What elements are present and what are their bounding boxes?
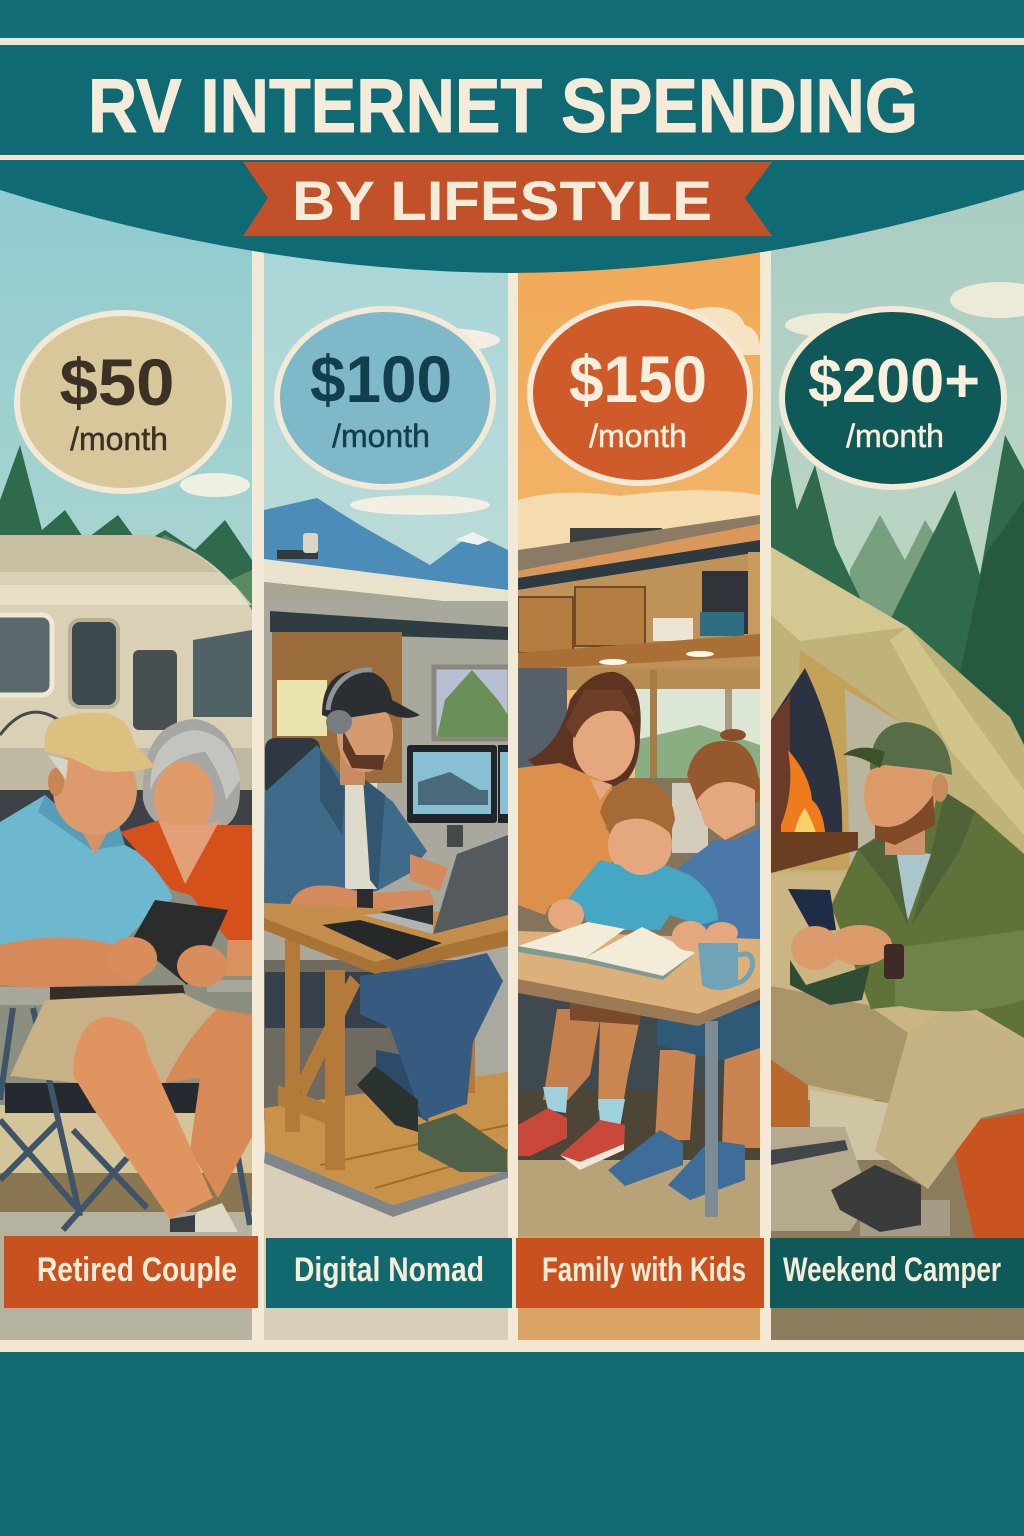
legs and shorts xyxy=(543,1000,760,1148)
ground xyxy=(0,850,252,1340)
fire xyxy=(771,750,858,873)
footer band xyxy=(0,1340,1024,1536)
banner: by lifestyle xyxy=(243,162,772,236)
banner: by lifestyle: BY LIFESTYLE xyxy=(292,169,712,232)
shoes xyxy=(518,1108,745,1200)
interior wall xyxy=(264,601,508,1121)
RV roof xyxy=(264,533,508,601)
label: weekend camper xyxy=(770,1238,1024,1308)
ground xyxy=(771,873,1024,1340)
gear xyxy=(771,1028,950,1236)
panel: retired couple xyxy=(0,180,252,1340)
price badge: $100: $100 xyxy=(310,342,452,416)
chair armrests xyxy=(0,980,252,1005)
woman xyxy=(120,719,252,976)
hands xyxy=(107,937,227,987)
lights xyxy=(599,651,714,665)
man's legs xyxy=(73,1009,252,1232)
man torso xyxy=(264,745,448,913)
panel: digital nomad xyxy=(264,180,510,1340)
tent opening xyxy=(771,650,905,870)
table leg xyxy=(705,1021,718,1217)
mother xyxy=(518,672,641,905)
panel: family with kids xyxy=(518,180,760,1340)
laptop xyxy=(363,835,508,934)
price badge: $150: /month xyxy=(589,418,687,454)
price badge: $50: $50 xyxy=(60,345,174,419)
man head xyxy=(322,670,420,785)
RV body xyxy=(0,535,252,850)
pants xyxy=(771,986,1024,1189)
panel: weekend camper xyxy=(771,180,1024,1340)
trees xyxy=(0,445,252,580)
price badge: $50 xyxy=(17,313,229,491)
tablet xyxy=(132,900,228,985)
desk legs xyxy=(278,939,475,1170)
mug xyxy=(698,943,752,990)
price badge: $150: $150 xyxy=(569,342,707,416)
folding chair xyxy=(0,1008,250,1230)
label: retired couple xyxy=(4,1236,258,1308)
window xyxy=(434,667,510,739)
blanket xyxy=(948,1113,1024,1240)
price badge: $100 xyxy=(277,309,493,487)
label: digital nomad xyxy=(266,1238,512,1308)
torso xyxy=(790,792,1024,1038)
tent xyxy=(771,547,1024,900)
label: family with kids xyxy=(516,1238,764,1308)
boot xyxy=(831,1165,921,1232)
cabinets xyxy=(518,552,760,653)
jeans xyxy=(360,953,503,1122)
under-table background xyxy=(518,990,760,1340)
hands and watch xyxy=(791,925,904,979)
chair xyxy=(265,738,320,792)
boy xyxy=(518,778,718,931)
shelf xyxy=(518,634,760,670)
price badge: $150 xyxy=(530,303,750,483)
hands on book xyxy=(672,921,738,951)
phone xyxy=(788,889,836,932)
label: digital nomad: Digital Nomad xyxy=(294,1251,484,1289)
book xyxy=(518,922,695,980)
forest xyxy=(771,425,1024,770)
price badge: $200+ xyxy=(782,309,1004,487)
roof xyxy=(518,515,760,590)
floor xyxy=(264,1072,508,1340)
man torso xyxy=(0,790,173,988)
boots xyxy=(357,1066,507,1172)
window xyxy=(518,668,760,938)
table xyxy=(518,931,760,1026)
desk xyxy=(264,903,508,974)
wall xyxy=(518,552,760,670)
panel frames xyxy=(252,190,771,1340)
shorts xyxy=(10,993,220,1083)
man's head and hat xyxy=(45,713,156,835)
chair seat xyxy=(265,972,387,1028)
belt xyxy=(50,985,186,1000)
header background xyxy=(0,0,1024,273)
price badge: $200+: /month xyxy=(846,418,944,454)
label: family with kids: Family with Kids xyxy=(542,1251,746,1289)
price badge: $50: /month xyxy=(70,421,168,457)
title: RV INTERNET SPENDING xyxy=(88,64,918,149)
mountains xyxy=(264,498,508,601)
clouds above roof xyxy=(518,490,760,555)
price badge: $200+: $200+ xyxy=(808,347,980,416)
tablet on desk xyxy=(322,920,442,960)
label: retired couple: Retired Couple xyxy=(37,1251,237,1289)
head xyxy=(843,722,952,855)
price badge: $100: /month xyxy=(332,418,430,454)
monitors xyxy=(407,745,510,847)
girl xyxy=(678,729,760,940)
